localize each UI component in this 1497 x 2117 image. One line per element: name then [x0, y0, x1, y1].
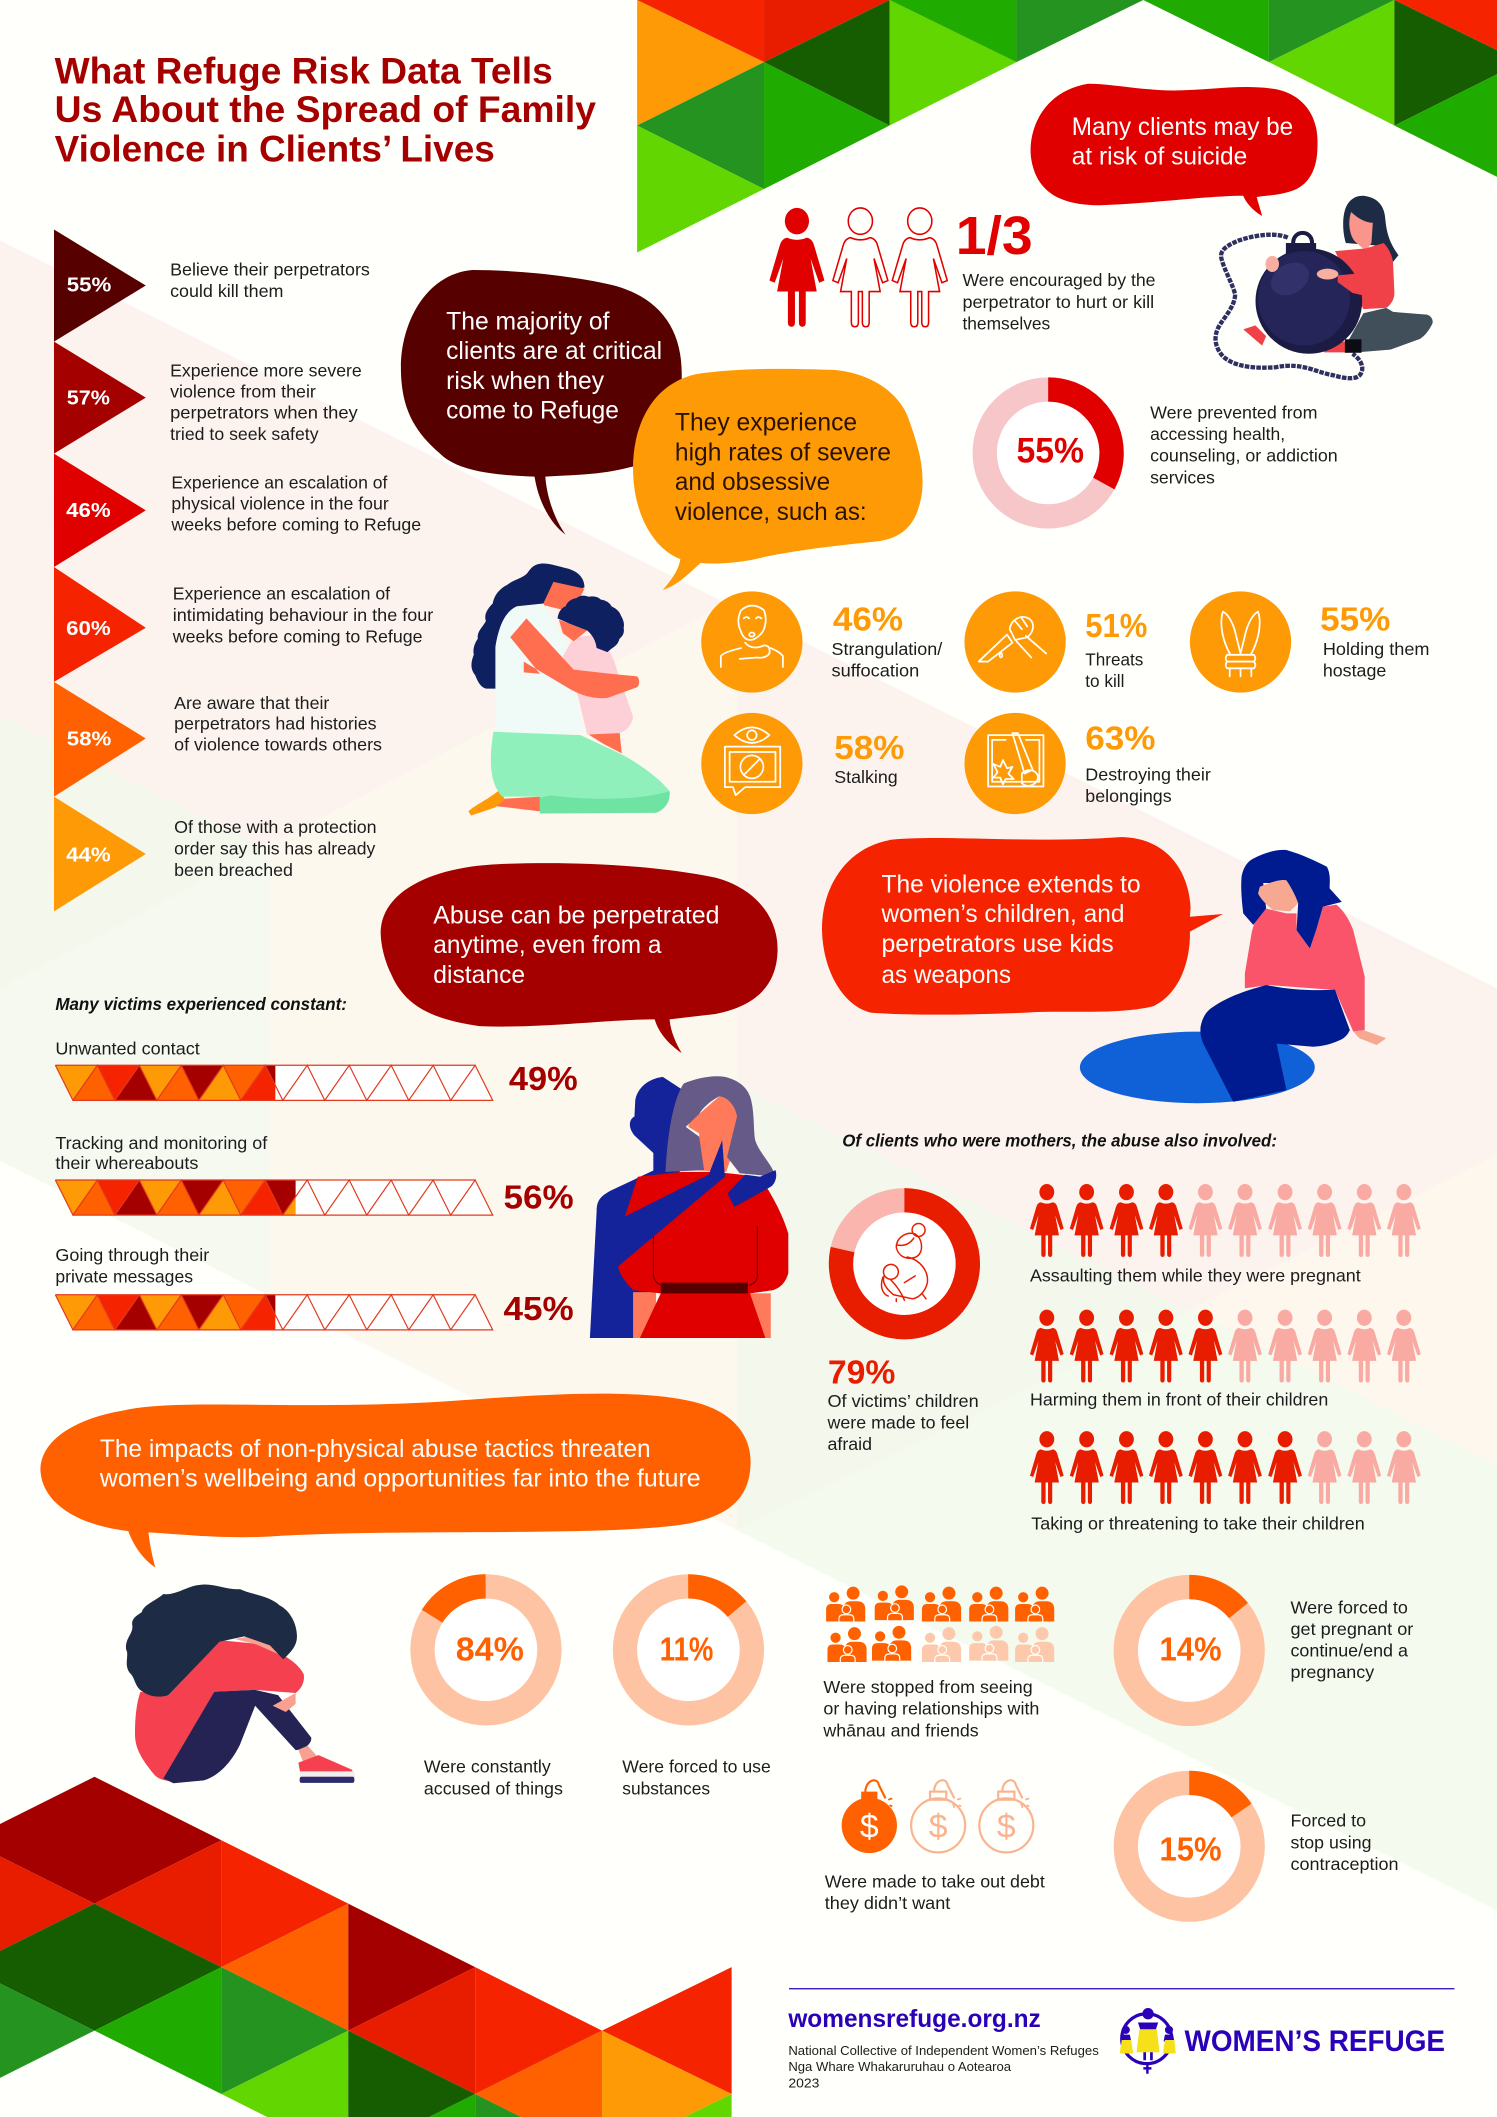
- speech bubble: critical risk: [401, 270, 682, 535]
- bar: 56% tracking: Tracking and monitoring of: [55, 1133, 267, 1153]
- stat: 46% strangulation: 46%: [833, 601, 903, 639]
- stat: 58% stalking: Stalking: [834, 767, 898, 787]
- donut chart: 11% forced to use substances: substances: [622, 1778, 710, 1798]
- donut chart: 79% children afraid: Of victims’ children: [827, 1391, 979, 1411]
- risk list: stacked triangles with statistics: [54, 230, 433, 911]
- icon: filled bomb: [842, 1780, 897, 1853]
- bottom triangle pattern: [0, 1777, 732, 2117]
- donut chart: 84% accused of things: [399, 1562, 573, 1798]
- text: prevented from accessing services: Were prevented from: [1150, 403, 1317, 423]
- stat: 55% hostage: [1190, 591, 1430, 693]
- stat: 58% stalking: 58%: [834, 729, 904, 767]
- pictogram: debt bombs: [825, 1780, 1045, 1913]
- logo: Women's Refuge: [1120, 2008, 1445, 2074]
- donut chart: 11% forced to use substances: [622, 1586, 771, 1798]
- donut chart: 55% prevented from services: [985, 390, 1112, 516]
- speech bubble: severe violence: high rates of severe: [675, 438, 891, 466]
- icon: mother and baby: [882, 1223, 928, 1302]
- title: What Refuge Risk Data Tells: [55, 49, 553, 91]
- stat: 60% intimidating behaviour: intimidating behaviour in the four: [173, 605, 433, 625]
- statistic: 1/3 encouraged to self-harm: 1/3: [956, 206, 1033, 266]
- stat: 58% stalking: [701, 713, 904, 814]
- icon: outlined bomb: $: [929, 1808, 948, 1846]
- speech bubble: severe violence: [633, 369, 923, 590]
- donut chart: 15% stop contraception: Forced to: [1290, 1811, 1366, 1831]
- pictogram: assaulting while pregnant: [1030, 1184, 1421, 1285]
- pictogram: families and friends: [822, 1585, 1054, 1740]
- text: prevented from accessing services: accessing health,: [1150, 424, 1285, 444]
- website and organisation: [787, 2005, 1099, 2090]
- stat: 60% intimidating behaviour: 60%: [66, 618, 111, 640]
- donut chart: 11% forced to use substances: Were forced to use: [622, 1757, 771, 1777]
- statistic: 1/3 encouraged to self-harm: Were encouraged by the: [962, 270, 1155, 290]
- donut chart: 14% forced pregnancy: continue/end a: [1290, 1641, 1408, 1661]
- pictogram: families and friends: Were stopped from seeing: [823, 1677, 1033, 1697]
- stat: 60% intimidating behaviour: [54, 567, 433, 682]
- donut chart: 84% accused of things: 84%: [456, 1631, 524, 1669]
- speech bubble: critical risk: The majority of: [446, 307, 610, 335]
- illustration: woman sitting at the edge of a hole: [1080, 850, 1386, 1103]
- stat: 63% destroying belongings: [964, 713, 1211, 814]
- donut chart: 15% stop contraception: stop using: [1290, 1832, 1371, 1852]
- stat: 58% histories of violence: 58%: [67, 729, 111, 751]
- stat: 55% hostage: 55%: [1320, 601, 1390, 639]
- stat: 58% histories of violence: Are aware that their: [174, 693, 330, 713]
- pictogram: taking their children: [1030, 1431, 1421, 1534]
- stat: 51% threats to kill: to kill: [1085, 671, 1124, 691]
- stat: 58% histories of violence: [54, 682, 382, 797]
- heading: many victims: Many victims experienced constant:: [55, 994, 347, 1014]
- speech bubble: non-physical abuse: The impacts of non-physical abuse tactics threaten: [100, 1435, 651, 1463]
- stat: 44% protection order: Of those with a protection: [174, 817, 377, 837]
- text: prevented from accessing services: counseling, or addiction: [1150, 446, 1338, 466]
- stat: 51% threats to kill: Threats: [1085, 650, 1144, 670]
- stat: 55% hostage: hostage: [1323, 660, 1386, 680]
- pictogram: debt bombs: they didn’t want: [825, 1893, 950, 1913]
- speech bubble: children as weapons: [822, 837, 1223, 1015]
- heading: clients who were mothers: Of clients who were mothers, the abuse also involved:: [842, 1130, 1277, 1150]
- donut chart: 15% stop contraception: contraception: [1290, 1854, 1398, 1874]
- statistic: 1/3 encouraged to self-harm: perpetrator to hurt or kill: [962, 292, 1154, 312]
- pictogram: harming in front of children: [1030, 1310, 1421, 1409]
- speech bubble: severe violence: violence, such as:: [675, 498, 867, 526]
- stat: 46% physical violence: physical violence in the four: [171, 494, 389, 514]
- speech bubble: children as weapons: women’s children, and: [880, 900, 1124, 928]
- website and organisation: Nga Whare Whakaruruhau o Aotearoa: [788, 2059, 1012, 2074]
- icon: outlined bomb: [979, 1780, 1033, 1852]
- stat: 60% intimidating behaviour: Experience an escalation of: [173, 583, 390, 603]
- bar: 45% private messages: Going through their: [55, 1245, 209, 1265]
- website and organisation: 2023: [788, 2075, 819, 2090]
- donut chart: 14% forced pregnancy: [1126, 1587, 1413, 1714]
- bar: 49% unwanted contact: 49%: [509, 1060, 578, 1098]
- donut chart: 79% children afraid: were made to feel: [826, 1412, 969, 1432]
- stat: 44% protection order: 44%: [66, 844, 111, 866]
- stat: 63% destroying belongings: belongings: [1085, 786, 1172, 806]
- stat: 46% physical violence: 46%: [66, 500, 111, 522]
- speech bubble: critical risk: clients are at critical: [446, 337, 662, 365]
- speech bubble: severe violence: and obsessive: [675, 468, 830, 496]
- donut chart: 15% stop contraception: [1126, 1783, 1398, 1910]
- donut chart: 14% forced pregnancy: pregnancy: [1290, 1662, 1374, 1682]
- stat: 46% physical violence: weeks before coming to Refuge: [170, 515, 421, 535]
- bar: 49% unwanted contact: [55, 1038, 578, 1100]
- pictogram: one in three women: [769, 208, 947, 327]
- stat: 55% hostage: Holding them: [1323, 639, 1430, 659]
- stat: 55% kill: Believe their perpetrators: [170, 259, 370, 279]
- title: Violence in Clients’ Lives: [55, 128, 495, 170]
- illustration: woman curled up with head on knees: [126, 1584, 355, 1783]
- speech bubble: critical risk: risk when they: [446, 367, 605, 395]
- illustration: mother hugging child: [468, 563, 670, 815]
- donut chart: 11% forced to use substances: 11%: [660, 1631, 713, 1669]
- donut chart: 14% forced pregnancy: Were forced to: [1290, 1597, 1408, 1617]
- speech bubble: perpetrated from a distance: Abuse can be perpetrated: [433, 901, 719, 929]
- speech bubble: critical risk: come to Refuge: [446, 397, 619, 425]
- stat: 44% protection order: [54, 797, 377, 911]
- top triangle pattern: [637, 0, 1497, 252]
- bar: 56% tracking: 56%: [503, 1178, 574, 1216]
- stat: 55% kill: [54, 230, 370, 342]
- stat: 57% severe violence: 57%: [67, 387, 110, 409]
- stat: 57% severe violence: violence from their: [170, 382, 316, 402]
- donut chart: 79% children afraid: 79%: [828, 1353, 895, 1391]
- pictogram: families and friends: whānau and friends: [822, 1720, 979, 1740]
- speech bubble: perpetrated from a distance: [381, 863, 778, 1053]
- donut chart: 79% children afraid: afraid: [827, 1434, 872, 1454]
- speech bubble: non-physical abuse: [40, 1394, 751, 1567]
- stat: 57% severe violence: perpetrators when they: [170, 403, 358, 423]
- stat: 57% severe violence: Experience more severe: [170, 361, 362, 381]
- donut chart: 79% children afraid: [826, 1200, 979, 1454]
- stat: 46% physical violence: [54, 454, 421, 567]
- stat: 55% kill: 55%: [67, 275, 111, 297]
- website and organisation: National Collective of Independent Women’s Refuges: [788, 2043, 1099, 2058]
- illustration: woman chained to a ball: [1216, 196, 1433, 378]
- pictogram: harming in front of children: Harming them in front of their children: [1030, 1389, 1328, 1409]
- speech bubble: children as weapons: The violence extends to: [881, 870, 1141, 898]
- text: prevented from accessing services: [1150, 403, 1338, 487]
- orange stat icons and labels: [701, 591, 1430, 814]
- donut chart: 14% forced pregnancy: get pregnant or: [1290, 1619, 1413, 1639]
- pictogram: assaulting while pregnant: Assaulting them while they were pregnant: [1030, 1265, 1361, 1285]
- icon: outlined bomb: [911, 1780, 965, 1852]
- donut chart: 15% stop contraception: 15%: [1160, 1830, 1222, 1868]
- stat: 46% strangulation: Strangulation/: [832, 639, 942, 659]
- donut chart: 14% forced pregnancy: 14%: [1160, 1631, 1222, 1669]
- stat: 51% threats to kill: [964, 591, 1147, 693]
- stat: 63% destroying belongings: 63%: [1085, 719, 1155, 757]
- stat: 60% intimidating behaviour: weeks before coming to Refuge: [172, 627, 423, 647]
- stat: 46% physical violence: Experience an escalation of: [171, 473, 388, 493]
- pictogram: taking their children: Taking or threatening to take their children: [1031, 1514, 1365, 1534]
- stat: 46% strangulation: suffocation: [832, 660, 919, 680]
- bar: 49% unwanted contact: Unwanted contact: [55, 1038, 200, 1058]
- stat: 46% strangulation: [701, 591, 942, 693]
- title: [55, 49, 596, 170]
- speech bubble: children as weapons: as weapons: [881, 961, 1011, 989]
- speech bubble: perpetrated from a distance: anytime, even from a: [433, 931, 662, 959]
- bar: 45% private messages: private messages: [55, 1267, 193, 1287]
- website and organisation: womensrefuge.org.nz: [787, 2005, 1041, 2033]
- statistic: 1/3 encouraged to self-harm: themselves: [962, 313, 1050, 333]
- text: prevented from accessing services: services: [1150, 467, 1215, 487]
- icon: outlined bomb: $: [997, 1808, 1016, 1846]
- bar: 45% private messages: [55, 1245, 574, 1330]
- footer: [787, 1989, 1454, 2090]
- stat: 51% threats to kill: 51%: [1085, 607, 1147, 645]
- stat: 57% severe violence: tried to seek safety: [170, 424, 319, 444]
- statistic: 1/3 encouraged to self-harm: [956, 206, 1155, 333]
- stat: 44% protection order: order say this has already: [174, 839, 375, 859]
- pictogram: debt bombs: Were made to take out debt: [825, 1871, 1045, 1891]
- speech bubble: children as weapons: perpetrators use kids: [881, 930, 1114, 958]
- speech bubble: risk of suicide: Many clients may be: [1072, 113, 1293, 141]
- speech bubble: risk of suicide: [1031, 84, 1318, 216]
- speech bubble: severe violence: They experience: [675, 409, 857, 437]
- stat: 44% protection order: been breached: [174, 860, 293, 880]
- donut chart: 84% accused of things: Were constantly: [424, 1757, 551, 1777]
- stat: 58% histories of violence: of violence towards others: [174, 735, 382, 755]
- stat: 57% severe violence: [54, 342, 362, 454]
- illustration: abuser silencing woman: [590, 1076, 788, 1338]
- title: Us About the Spread of Family: [55, 88, 596, 130]
- bar: 56% tracking: their whereabouts: [55, 1153, 199, 1173]
- icon: filled bomb: $: [860, 1808, 879, 1846]
- speech bubble: perpetrated from a distance: distance: [433, 961, 525, 989]
- bar: 45% private messages: 45%: [503, 1290, 574, 1328]
- pictogram: families and friends: or having relationships with: [823, 1699, 1039, 1719]
- donut chart: 55% prevented from services: 55%: [1016, 432, 1084, 471]
- stat: 55% kill: could kill them: [170, 281, 283, 301]
- speech bubble: risk of suicide: at risk of suicide: [1072, 143, 1247, 171]
- stat: 58% histories of violence: perpetrators had histories: [174, 714, 377, 734]
- logo: Women's Refuge: WOMEN’S REFUGE: [1185, 2025, 1445, 2058]
- speech bubble: non-physical abuse: women’s wellbeing and opportunities far into the future: [99, 1464, 701, 1492]
- donut chart: 84% accused of things: accused of things: [424, 1778, 563, 1798]
- bar: 56% tracking: [55, 1133, 574, 1216]
- stat: 63% destroying belongings: Destroying their: [1085, 764, 1211, 784]
